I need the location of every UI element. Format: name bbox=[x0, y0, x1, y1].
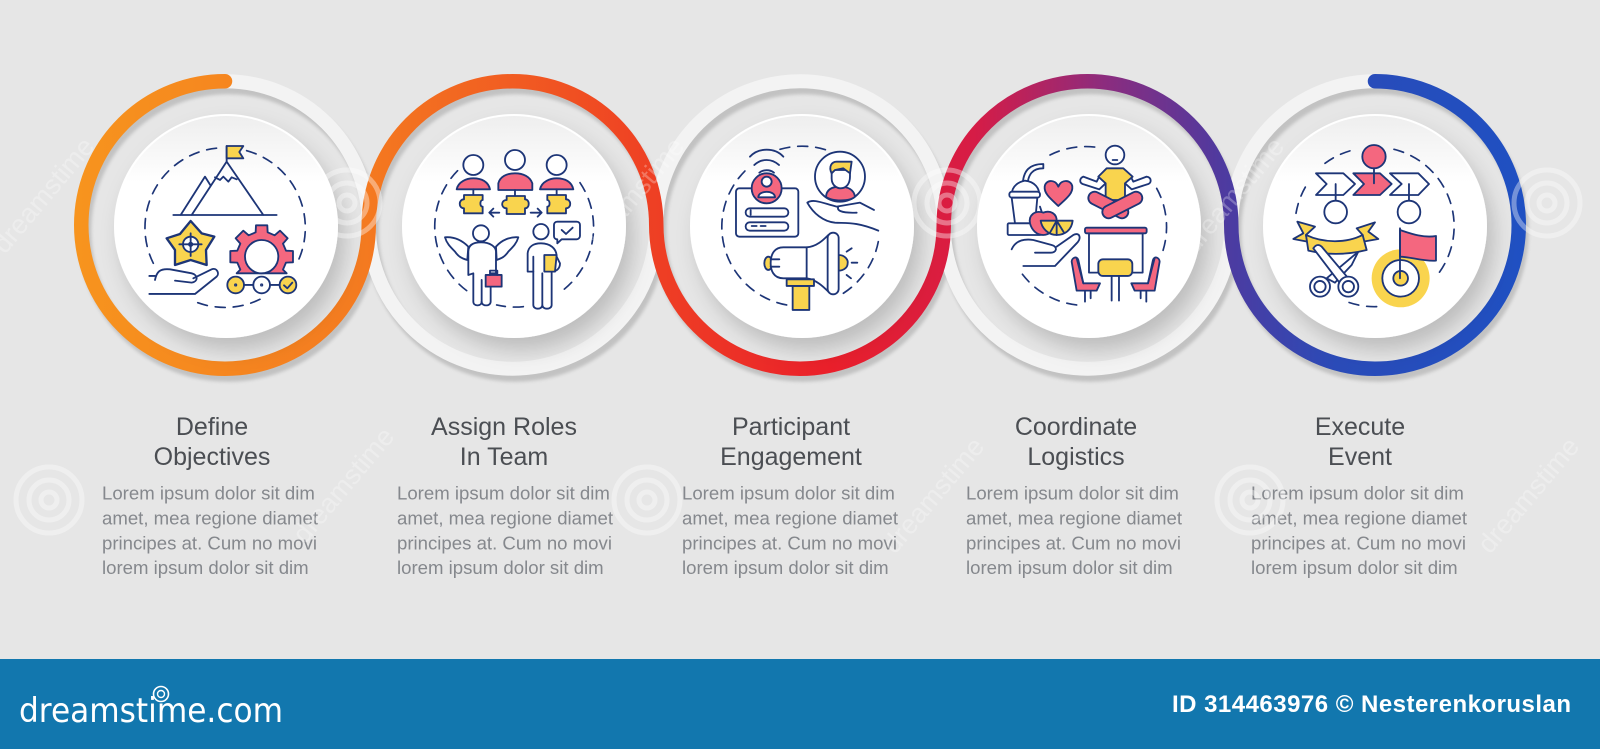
text block: participant engagement: principes at. Cum no movi bbox=[682, 532, 897, 554]
heading: coordinate logistics: Coordinate bbox=[1015, 413, 1137, 441]
text block: execute event: principes at. Cum no movi bbox=[1251, 532, 1466, 554]
text block: coordinate logistics: lorem ipsum dolor sit dim bbox=[966, 557, 1173, 578]
icon: id card and megaphone bbox=[722, 146, 878, 310]
panel: assign roles in team bbox=[397, 115, 625, 578]
heading: define objectives: Objectives bbox=[154, 443, 270, 471]
icon: mountain star gear bbox=[145, 146, 305, 307]
watermark overlay: dreamstime bbox=[1472, 432, 1585, 559]
icon: team puzzle bbox=[435, 150, 594, 309]
icon: food, meditation and seating bbox=[1008, 146, 1167, 305]
watermark overlay: dreamstime bbox=[577, 132, 690, 259]
text block: define objectives: amet, mea regione diamet bbox=[102, 508, 319, 528]
watermark overlay: dreamstime bbox=[1177, 132, 1290, 259]
text block: participant engagement: lorem ipsum dolor sit dim bbox=[682, 557, 889, 578]
text block: define objectives: Lorem ipsum dolor sit dim bbox=[102, 482, 315, 504]
text block: assign roles: Lorem ipsum dolor sit dim bbox=[397, 482, 610, 504]
text block: execute event: lorem ipsum dolor sit dim bbox=[1251, 557, 1458, 578]
heading: assign roles: Assign Roles bbox=[431, 413, 577, 441]
text block: participant engagement: Lorem ipsum dolor sit dim bbox=[682, 482, 895, 504]
text block: participant engagement: amet, mea regione diamet bbox=[682, 508, 899, 528]
white disc 1 bbox=[115, 115, 337, 337]
panel: define objectives bbox=[102, 115, 337, 578]
panel: execute event bbox=[1251, 115, 1486, 578]
heading: assign roles: In Team bbox=[460, 443, 548, 471]
text block: execute event: Lorem ipsum dolor sit dim bbox=[1251, 482, 1464, 504]
heading: participant engagement: Engagement bbox=[720, 443, 862, 471]
image id and credit: ID 314463976 © Nesterenkoruslan bbox=[1172, 691, 1571, 718]
heading: execute event: Event bbox=[1328, 443, 1392, 471]
text block: define objectives: principes at. Cum no movi bbox=[102, 532, 317, 554]
text block: coordinate logistics: Lorem ipsum dolor sit dim bbox=[966, 482, 1179, 504]
coloured ribbon bbox=[81, 81, 1519, 369]
heading: define objectives: Define bbox=[176, 413, 248, 441]
heading: participant engagement: Participant bbox=[732, 413, 850, 441]
text block: execute event: amet, mea regione diamet bbox=[1251, 508, 1468, 528]
icon: process, ribbon and target bbox=[1293, 145, 1454, 307]
watermark overlay bbox=[0, 132, 1585, 559]
text block: assign roles: principes at. Cum no movi bbox=[397, 532, 612, 554]
white ring segments bbox=[225, 81, 1375, 369]
white disc 5 bbox=[1264, 115, 1486, 337]
white disc 2 bbox=[403, 115, 625, 337]
heading: execute event: Execute bbox=[1315, 413, 1405, 441]
logo: dreamstime: dreamstime.com bbox=[19, 691, 283, 731]
text block: assign roles: amet, mea regione diamet bbox=[397, 508, 614, 528]
ribbon shadow bbox=[84, 87, 1522, 375]
footer banner bbox=[0, 659, 1600, 749]
watermark overlay: dreamstime bbox=[287, 422, 400, 549]
text block: assign roles: lorem ipsum dolor sit dim bbox=[397, 557, 604, 578]
white disc 4 bbox=[978, 115, 1200, 337]
text block: coordinate logistics: amet, mea regione diamet bbox=[966, 508, 1183, 528]
text block: coordinate logistics: principes at. Cum no movi bbox=[966, 532, 1181, 554]
white disc 3 bbox=[691, 115, 913, 337]
text block: define objectives: lorem ipsum dolor sit dim bbox=[102, 557, 309, 578]
watermark overlay: dreamstime bbox=[877, 432, 990, 559]
panel: coordinate logistics bbox=[966, 115, 1200, 578]
panel: participant engagement bbox=[682, 115, 913, 578]
heading: coordinate logistics: Logistics bbox=[1027, 443, 1125, 471]
